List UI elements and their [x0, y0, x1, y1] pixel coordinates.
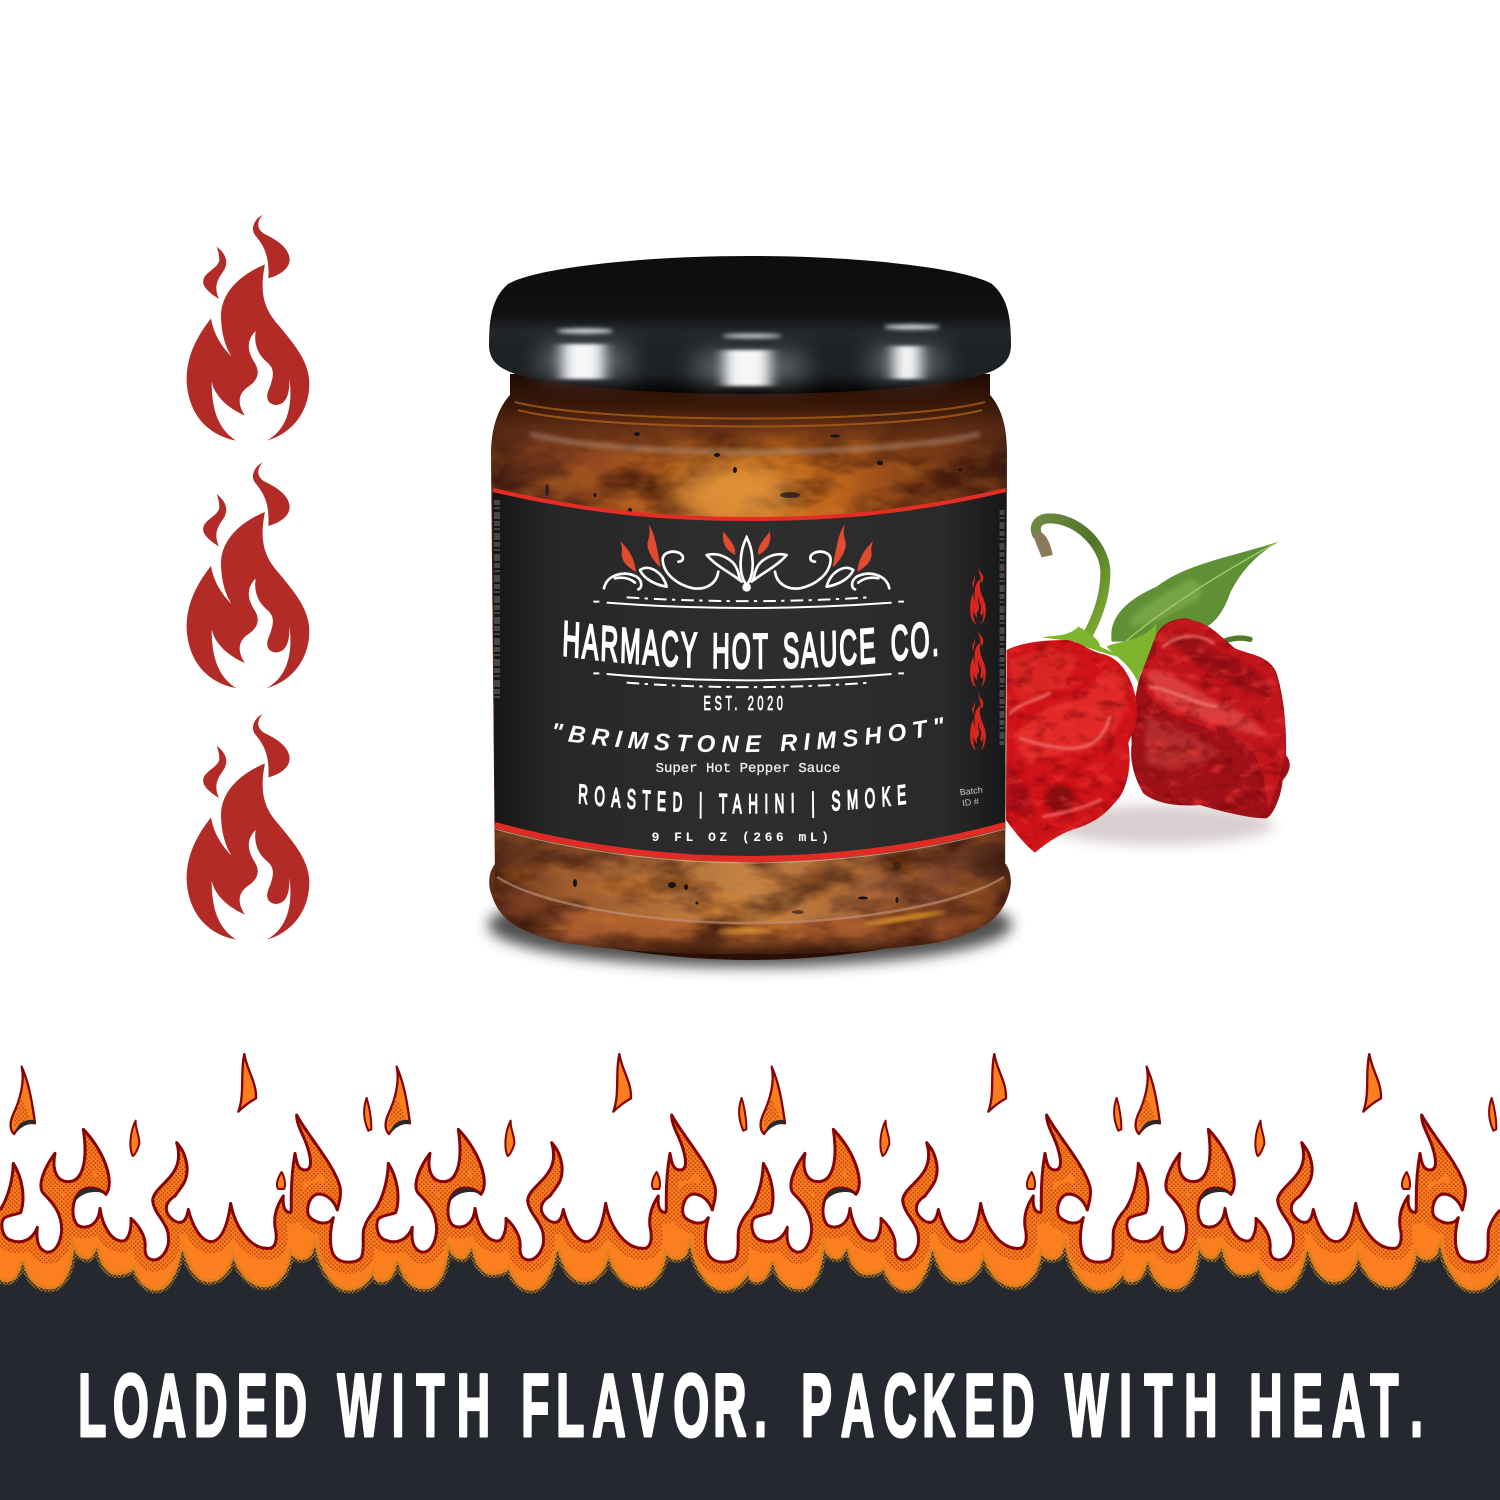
- lower dashes: [593, 673, 904, 687]
- lower rim shading: [489, 862, 1011, 954]
- left pepper shade: [1007, 763, 1035, 818]
- label flame 1: [970, 567, 986, 624]
- lid: [489, 256, 1011, 394]
- pepper stem: [1036, 518, 1105, 638]
- flame tile 2: [375, 1054, 750, 1307]
- calyx left: [1042, 627, 1117, 657]
- brand name: HARMACY HOT SAUCE CO.: [563, 620, 938, 670]
- sauce specks lower: [573, 862, 901, 914]
- rim highlights: [863, 909, 947, 927]
- icon: flame 2: [187, 462, 309, 688]
- ornament right half: [752, 524, 889, 589]
- right pepper upper: [1142, 619, 1285, 808]
- lower rim: [489, 862, 1011, 954]
- batch id: [959, 785, 985, 808]
- flame tile 1: [0, 1054, 375, 1307]
- label bottom pale edge: [495, 829, 1005, 863]
- left pepper highlights: [1016, 667, 1126, 760]
- heat rating flames: [187, 215, 309, 940]
- right pepper lower sheen: [1143, 713, 1220, 770]
- right pepper lower: [1131, 618, 1290, 818]
- sauce descriptor: Super Hot Pepper Sauce: [656, 761, 840, 777]
- jar: [478, 256, 1022, 978]
- flame border: [0, 1054, 1500, 1307]
- label red band top: [493, 490, 1006, 519]
- sauce body: [491, 374, 1007, 880]
- leaf: [1111, 542, 1278, 642]
- left pepper body: [1006, 640, 1137, 853]
- pepper gloss texture: [1006, 620, 1286, 851]
- net volume: 9 FL OZ (266 mL): [652, 830, 832, 845]
- sauce specks upper: [545, 432, 962, 512]
- batch id: ID #: [962, 796, 979, 808]
- right pepper sheen: [1147, 671, 1270, 740]
- icon: flame 3: [187, 714, 309, 940]
- ornament center spear: [741, 537, 753, 585]
- upper dashes: [593, 597, 904, 602]
- stem tip: [1034, 531, 1053, 557]
- ornament left half: [604, 524, 742, 589]
- established date: EST. 2020: [704, 693, 786, 715]
- jar base: [503, 890, 997, 960]
- leaf midrib: [1123, 543, 1277, 643]
- label side fine print: [497, 500, 1002, 745]
- rim seam: [497, 877, 1004, 923]
- flavor name: "BRIMSTONE RIMSHOT": [554, 717, 943, 752]
- peppers photo: [1000, 518, 1300, 857]
- shoulder streak: [530, 434, 980, 452]
- pepper shadow: [1047, 805, 1273, 845]
- flavor notes: ROASTED | TAHINI | SMOKE: [578, 784, 906, 819]
- logo ornament: [593, 524, 904, 687]
- lower rule: [607, 674, 892, 680]
- lower sauce band: [495, 810, 1005, 922]
- upper rule: [607, 603, 892, 608]
- label flame 2: [970, 630, 986, 687]
- left pepper top sheen: [1010, 651, 1077, 702]
- dark footer band: [0, 1295, 1500, 1500]
- label heat flames: [970, 567, 986, 750]
- lid upper glints: [557, 324, 940, 338]
- label red band bottom: [495, 825, 1005, 859]
- neck shade: [491, 374, 1007, 460]
- calyx right: [1107, 623, 1157, 683]
- sauce texture: [485, 400, 1015, 960]
- neck thread lines: [515, 402, 985, 426]
- pepper specular streaks: [1010, 636, 1217, 817]
- batch id: Batch: [959, 785, 983, 797]
- jar shadow: [488, 883, 1012, 967]
- label flame 3: [970, 693, 986, 750]
- lid highlights: [562, 344, 921, 386]
- flame tile 3: [750, 1054, 1125, 1307]
- lid highlight halos: [540, 345, 945, 382]
- right stem stub: [1223, 638, 1250, 642]
- label: [493, 489, 1006, 860]
- sauce glow: [673, 463, 797, 527]
- right pepper shade: [1170, 633, 1273, 700]
- leaf light patches: [1130, 579, 1201, 627]
- rim highlight center: [717, 928, 773, 934]
- ornament center dot: [742, 583, 751, 592]
- left pepper dimple: [1045, 784, 1075, 812]
- icon: flame 1: [187, 215, 309, 441]
- flame tile 4: [1125, 1054, 1500, 1307]
- tagline: LOADED WITH FLAVOR. PACKED WITH HEAT.: [78, 1357, 1423, 1456]
